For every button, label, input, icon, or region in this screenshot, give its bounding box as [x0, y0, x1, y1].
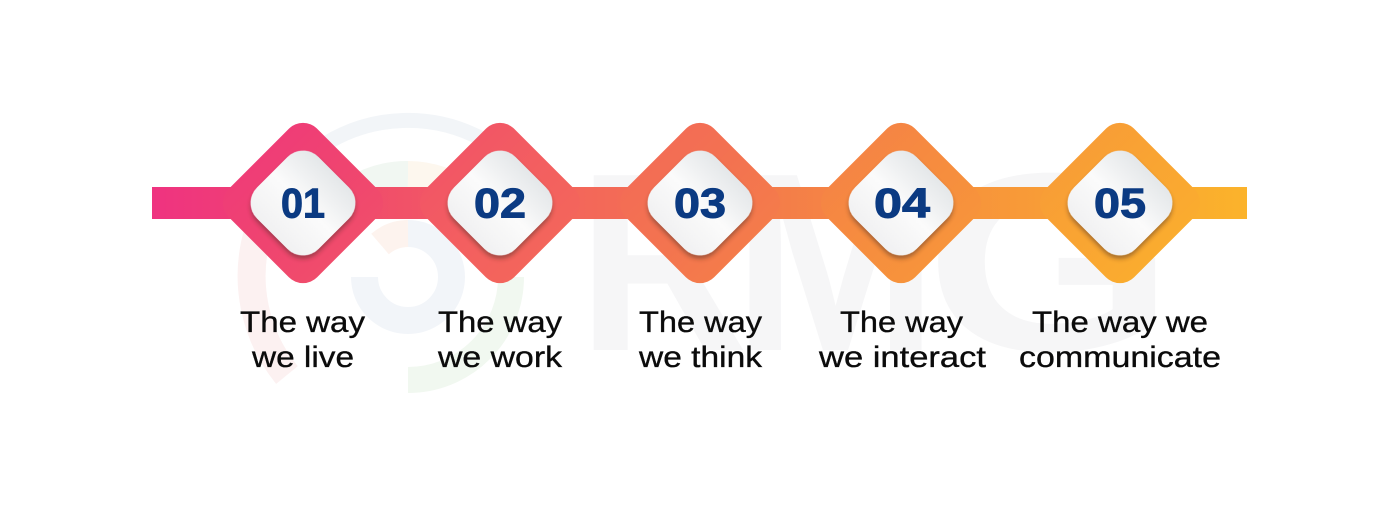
step 02 badge: 02 [474, 180, 526, 226]
timeline ribbon with diamonds [152, 115, 1247, 291]
horizontal bar [152, 187, 1247, 219]
label 04: The way we interact: we interact [818, 341, 987, 374]
diamond 03 [612, 115, 788, 291]
diamond 05 [1032, 115, 1208, 291]
label 01: The way we live: The way [240, 306, 365, 339]
step 04 badge: 04 [874, 180, 931, 226]
watermark: RMG logo [252, 120, 511, 380]
label 01: The way we live: we live [251, 341, 354, 374]
watermark: RMG letters: G [925, 120, 1175, 404]
step 03 badge [638, 141, 762, 265]
watermark: RMG letters: R [578, 120, 748, 404]
diamond 02 [412, 115, 588, 291]
label 04: The way we interact: The way [840, 306, 963, 339]
label 04: The way we interact [818, 306, 987, 374]
label 01: The way we live [240, 306, 365, 374]
step 04 badge [839, 141, 963, 265]
step 03 badge: 03 [674, 180, 726, 226]
step 02 badge [438, 141, 562, 265]
label 03: The way we think [638, 306, 763, 374]
label 05: The way we communicate: communicate [1019, 341, 1221, 374]
label 05: The way we communicate [1019, 306, 1221, 374]
label 02: The way we work: we work [437, 341, 563, 374]
watermark: RMG letters [578, 120, 1175, 404]
diamond 01 [215, 115, 391, 291]
step 01 badge [241, 141, 365, 265]
label 03: The way we think: The way [639, 306, 762, 339]
watermark: RMG letters: M [733, 120, 938, 404]
label 02: The way we work [437, 306, 563, 374]
label 03: The way we think: we think [638, 341, 763, 374]
step 05 badge: 05 [1094, 180, 1146, 226]
diamond 04 [813, 115, 989, 291]
label 05: The way we communicate: The way we [1032, 306, 1208, 339]
label 02: The way we work: The way [438, 306, 562, 339]
step 05 badge [1058, 141, 1182, 265]
step 01 badge: 01 [281, 180, 325, 226]
